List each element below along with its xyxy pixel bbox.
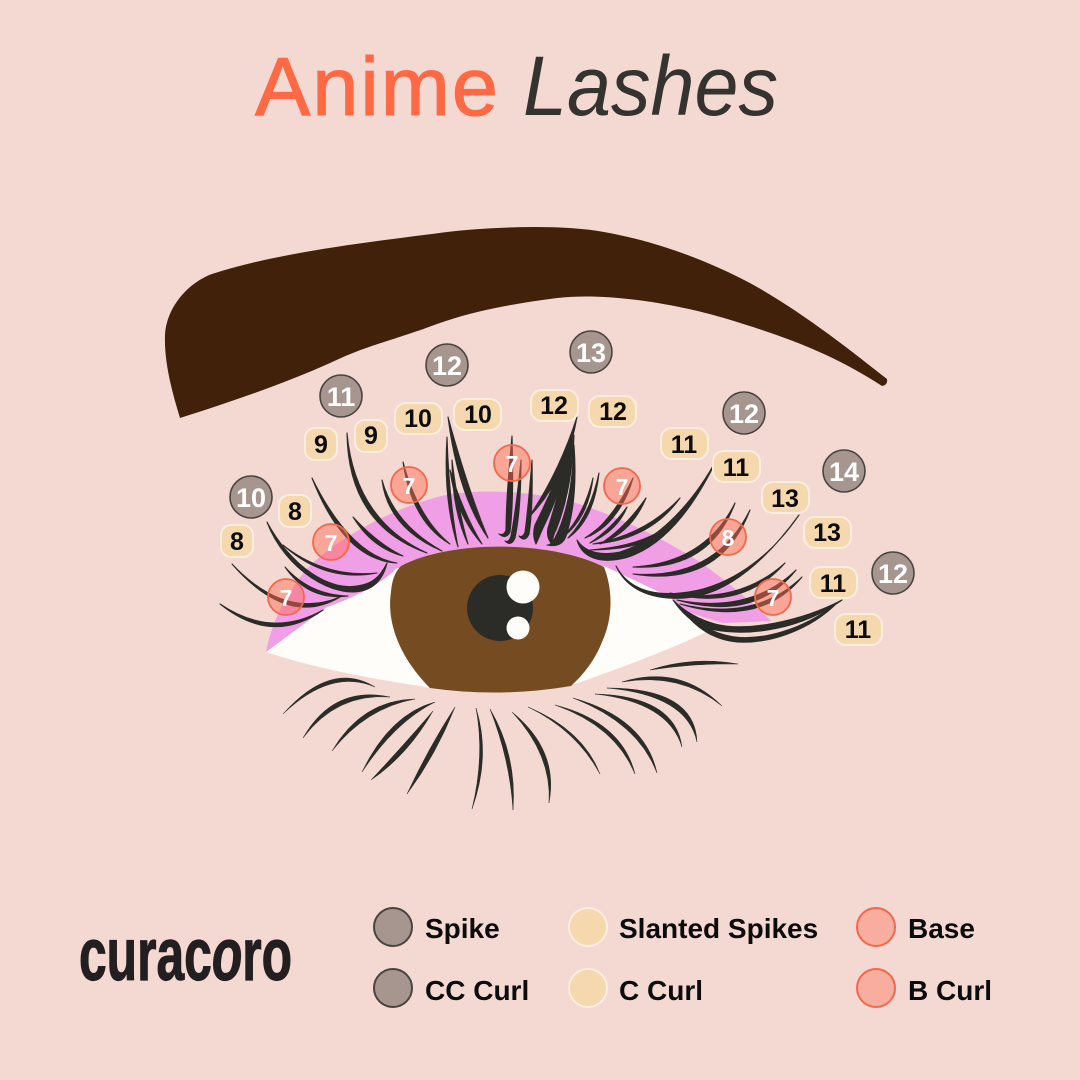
12: [589, 396, 636, 427]
legend: [374, 908, 992, 1007]
eyebrow: [165, 227, 887, 418]
legend: c curl: C Curl: [619, 975, 703, 1006]
spike 10: [230, 476, 272, 518]
legend: base: Base: [908, 913, 975, 944]
legend: slanted spikes: [569, 908, 818, 946]
spike 14: 14: [829, 457, 859, 487]
8: [279, 495, 311, 527]
lower highlight: [506, 616, 530, 640]
base 7: 7: [506, 451, 518, 477]
spike 12: [872, 552, 914, 594]
11: 11: [723, 454, 749, 482]
eyelid pink shadow: [266, 492, 771, 652]
spike 12: 12: [878, 559, 908, 589]
base 7: 7: [280, 585, 292, 611]
sclera: [266, 566, 708, 688]
spike 12: [723, 392, 765, 434]
base 7: [313, 524, 349, 560]
base 7: 7: [767, 585, 779, 611]
legend: cc curl: [374, 969, 529, 1007]
upper highlight: [506, 570, 540, 604]
base 7: [604, 468, 640, 504]
legend: slanted spikes: Slanted Spikes: [619, 913, 818, 944]
pupil: [467, 575, 533, 641]
legend: c curl: [569, 969, 703, 1007]
11: 11: [845, 616, 871, 644]
9: 9: [364, 422, 378, 450]
spike 11: [320, 375, 362, 417]
base 7: 7: [403, 473, 415, 499]
iris: [390, 547, 611, 693]
10: [395, 403, 442, 434]
spike badges: [230, 331, 914, 594]
13: [762, 482, 809, 513]
11: [835, 614, 882, 645]
eye: [266, 492, 771, 693]
10: 10: [464, 401, 492, 429]
base 7: 7: [616, 474, 628, 500]
11: [661, 428, 708, 459]
base 8: [710, 519, 746, 555]
10: [454, 399, 501, 430]
11: 11: [671, 431, 697, 459]
base 7: [391, 467, 427, 503]
legend: b curl: [857, 969, 992, 1007]
spike 12: 12: [729, 399, 759, 429]
8: [221, 525, 253, 557]
8: 8: [230, 528, 244, 556]
13: 13: [771, 485, 799, 513]
base 8: 8: [722, 525, 735, 551]
upper lashes: [220, 417, 842, 642]
12: 12: [599, 398, 627, 426]
legend: spike: [374, 908, 500, 946]
8: 8: [288, 498, 302, 526]
title: Lashes: [523, 39, 778, 133]
legend: cc curl: CC Curl: [425, 975, 529, 1006]
spike 12: 12: [432, 351, 462, 381]
base 7: [268, 579, 304, 615]
spike 12: [426, 344, 468, 386]
curl length badges: [221, 390, 882, 645]
9: [355, 420, 387, 452]
spike 10: 10: [236, 483, 266, 513]
base length badges: [268, 445, 791, 615]
spike 13: 13: [576, 338, 606, 368]
base 7: 7: [325, 530, 337, 556]
title: [255, 39, 778, 133]
legend: spike: Spike: [425, 913, 500, 944]
spike 14: [823, 450, 865, 492]
base 7: [494, 445, 530, 481]
lower lashes: [283, 661, 738, 810]
9: 9: [314, 431, 328, 459]
13: 13: [813, 519, 841, 547]
logo: curacoro: [79, 913, 292, 996]
legend: b curl: B Curl: [908, 975, 992, 1006]
11: 11: [820, 570, 846, 598]
spike 13: [570, 331, 612, 373]
12: 12: [540, 392, 568, 420]
11: [810, 567, 857, 598]
legend: base: [857, 908, 975, 946]
11: [713, 451, 760, 482]
9: [305, 428, 337, 460]
10: 10: [404, 405, 432, 433]
title: Anime: [255, 40, 498, 133]
spike 11: 11: [327, 382, 355, 412]
13: [804, 517, 851, 548]
base 7: [755, 579, 791, 615]
12: [531, 390, 578, 421]
